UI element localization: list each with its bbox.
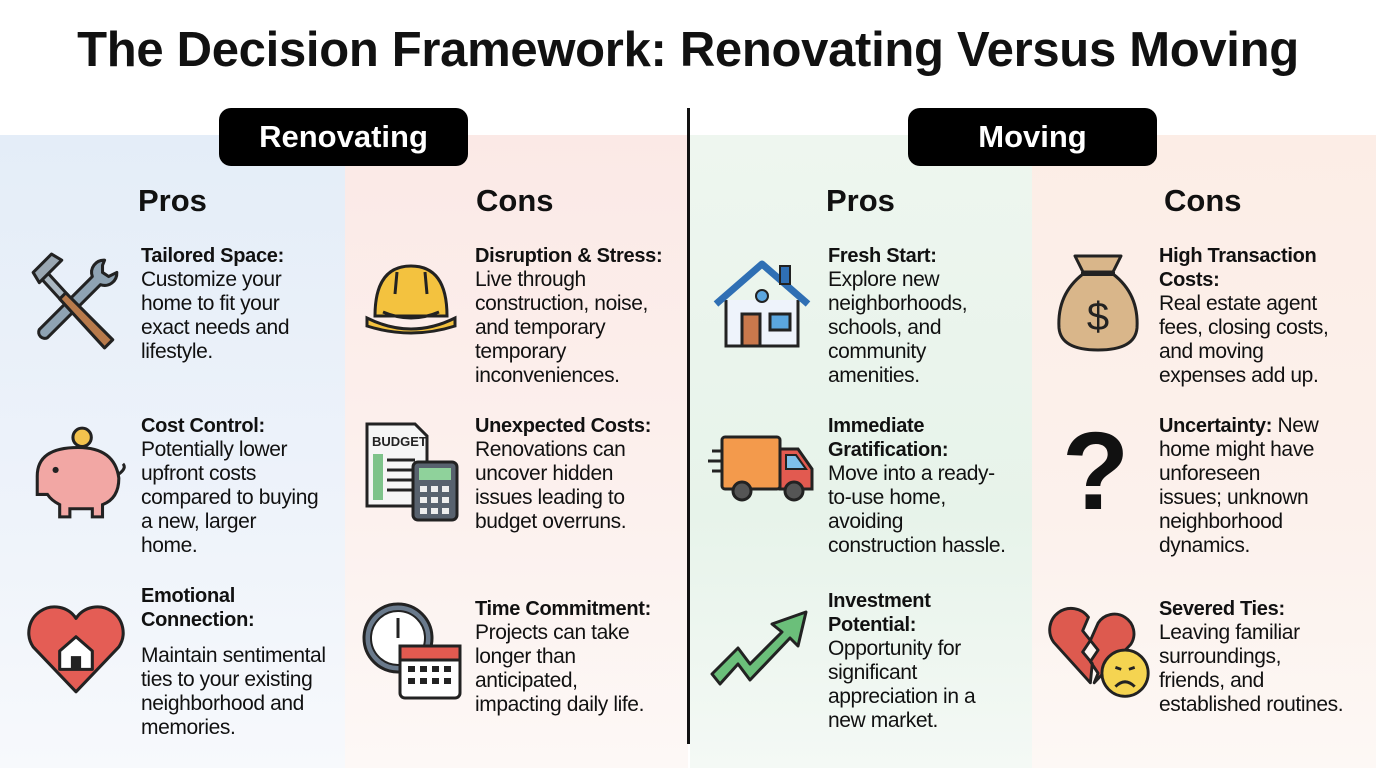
text: tailored space: home to fit your [141,292,279,315]
text: tailored space: lifestyle. [141,340,213,363]
icon: budget and calculator: BUDGET [372,434,427,449]
icon: hard hat [366,264,456,334]
text: time commitment: impacting daily life. [475,693,644,716]
text: disruption [475,245,662,387]
icon: money bag: $ [1087,295,1109,339]
text: emotional connection [141,585,326,739]
text: high transaction costs: fees, closing costs, [1159,316,1328,339]
text: emotional connection: neighborhood and [141,692,304,715]
text: time commitment: Time Commitment: [475,598,651,620]
text: investment potential: Potential: [828,614,916,636]
text: fresh start: Explore new [828,268,939,291]
text: fresh start [828,245,967,387]
icon: clock and calendar [362,602,462,700]
pill: Renovating: Renovating [259,119,428,154]
text: uncertainty: issues; unknown [1159,486,1308,509]
text: severed ties: established routines. [1159,693,1343,716]
text: time commitment: longer than [475,645,576,668]
text: tailored space: Tailored Space: [141,245,284,267]
text: tailored space: Customize your [141,268,281,291]
text: cost control: a new, larger [141,510,256,533]
text: unexpected costs [475,415,651,533]
text: emotional connection: Emotional [141,585,235,607]
heading: renovating pros: Pros [138,183,207,218]
text: disruption: Live through [475,268,586,291]
text: fresh start: amenities. [828,364,920,387]
text: immediate gratification: to-use home, [828,486,946,509]
text: unexpected costs: budget overruns. [475,510,626,533]
title: The Decision Framework: Renovating Versus Moving [77,23,1299,77]
icon: money bag [1057,254,1139,352]
text: immediate gratification: Move into a ready- [828,462,995,485]
icon: broken heart with sad face [1048,606,1150,698]
text: investment potential: appreciation in a [828,685,975,708]
heading: renovating cons: Cons [476,183,554,218]
divider line [687,108,690,744]
text: disruption: temporary [475,340,566,363]
text: unexpected costs: uncover hidden [475,462,613,485]
text: emotional connection: Connection: [141,609,254,631]
text: high transaction costs: Costs: [1159,269,1219,291]
pill: Moving: Moving [978,119,1087,154]
text: severed ties: Severed Ties: [1159,598,1285,620]
text: uncertainty [1159,414,1319,557]
text: high transaction costs: Real estate agent [1159,292,1317,315]
text: immediate gratification: Immediate [828,415,924,437]
text: high transaction costs: and moving [1159,340,1264,363]
text: time commitment: Projects can take [475,621,629,644]
text: disruption: construction, noise, [475,292,648,315]
text: fresh start: schools, and [828,316,941,339]
pill: Renovating [219,108,468,166]
text: fresh start: Fresh Start: [828,245,937,267]
text: investment potential: new market. [828,709,938,732]
text: investment potential: Opportunity for [828,637,961,660]
text: uncertainty: Uncertainty: New [1159,414,1318,437]
text: disruption: Disruption & Stress: [475,245,662,267]
text: high transaction costs: expenses add up. [1159,364,1318,387]
text: cost control [141,415,318,557]
text: uncertainty: unforeseen [1159,462,1260,485]
icon: rising arrow [710,610,808,686]
text: cost control: home. [141,534,197,557]
icon: moving truck [708,436,814,502]
icon: heart with house [27,605,125,694]
text: immediate gratification: avoiding [828,510,903,533]
text: cost control: compared to buying [141,486,318,509]
text: uncertainty: neighborhood [1159,510,1283,533]
text: unexpected costs: Renovations can [475,438,625,461]
text: immediate gratification: construction hassle. [828,534,1006,557]
text: investment potential: Investment [828,590,931,612]
text: immediate gratification: Gratification: [828,439,948,461]
text: investment potential [828,590,976,732]
text: uncertainty: dynamics. [1159,534,1250,557]
text: severed ties [1159,598,1343,716]
text: emotional connection: ties to your existing [141,668,312,691]
text: time commitment [475,598,651,716]
text: high transaction costs [1159,245,1328,387]
text: fresh start: neighborhoods, [828,292,967,315]
icon: house [714,260,810,348]
text: fresh start: community [828,340,926,363]
text: emotional connection: Maintain sentimental [141,644,326,667]
heading: moving pros: Pros [826,183,895,218]
text: investment potential: significant [828,661,917,684]
text: disruption: inconveniences. [475,364,620,387]
text: tailored space: exact needs and [141,316,289,339]
heading: moving cons: Cons [1164,183,1242,218]
icon: budget and calculator [366,422,458,522]
text: cost control: Potentially lower [141,438,287,461]
text: unexpected costs: Unexpected Costs: [475,415,651,437]
text: severed ties: friends, and [1159,669,1264,692]
text: time commitment: anticipated, [475,669,578,692]
text: immediate gratification [828,415,1006,557]
text: disruption: and temporary [475,316,605,339]
text: unexpected costs: issues leading to [475,486,625,509]
text: severed ties: surroundings, [1159,645,1281,668]
text: uncertainty: home might have [1159,438,1314,461]
text: emotional connection: memories. [141,716,235,739]
text: cost control: upfront costs [141,462,256,485]
text: tailored space [141,245,289,363]
text: high transaction costs: High Transaction [1159,245,1316,267]
pill: Moving [908,108,1157,166]
icon: question mark: ? [1062,410,1129,533]
icon: hammer and wrench [32,252,118,350]
text: severed ties: Leaving familiar [1159,621,1300,644]
icon: piggy bank [36,426,126,518]
text: cost control: Cost Control: [141,415,265,437]
